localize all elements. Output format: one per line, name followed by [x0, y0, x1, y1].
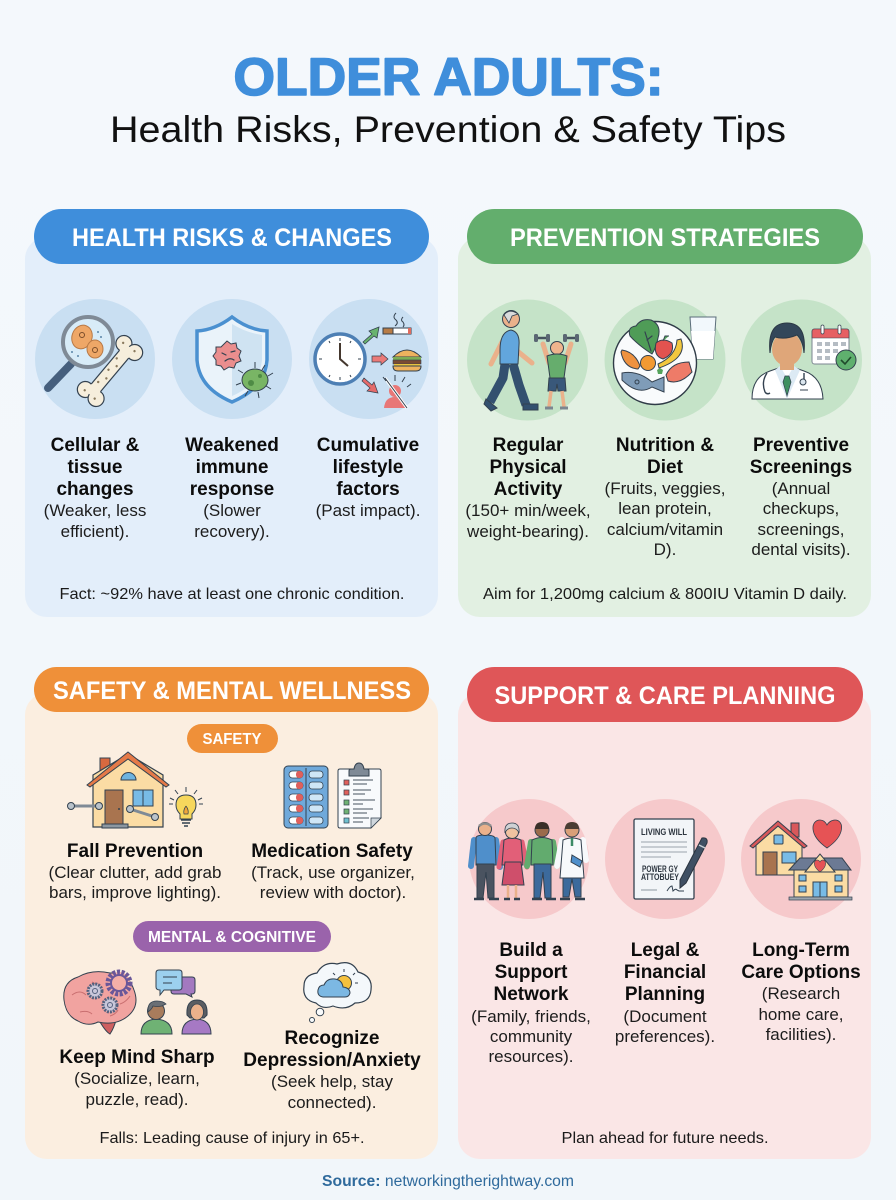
icon: legal document with pen: POWER GY: [642, 864, 678, 874]
text: regular physical activity: Physical: [489, 457, 567, 478]
text: preventive screenings: Screenings: [750, 457, 852, 478]
text: long-term care options: facilities).: [766, 1025, 836, 1044]
fact line: Falls: Leading cause of injury in 65+.: [100, 1130, 364, 1147]
heading: support and care planning: SUPPORT & CARE PLANNING: [494, 682, 836, 710]
sub-heading: safety: SAFETY: [202, 731, 262, 748]
text: legal and financial planning: Legal &: [631, 940, 700, 961]
text: weakened immune response: immune: [196, 457, 268, 478]
title: [110, 48, 786, 150]
text: keep mind sharp: [59, 1047, 215, 1109]
text: recognize depression and anxiety: [243, 1028, 421, 1112]
text: legal and financial planning: Financial: [624, 962, 706, 983]
text: build a support network: Support: [495, 962, 568, 983]
text: regular physical activity: [465, 435, 591, 541]
text: regular physical activity: Activity: [494, 479, 563, 500]
text: cellular and tissue changes: tissue: [68, 457, 122, 478]
text: preventive screenings: [750, 435, 852, 559]
text: nutrition and diet: (Fruits, veggies,: [605, 479, 725, 498]
icon: food plate with milk: [604, 300, 726, 420]
text: fall prevention: Fall Prevention: [67, 841, 203, 862]
text: nutrition and diet: [605, 435, 725, 559]
text: cellular and tissue changes: Cellular &: [51, 435, 140, 456]
text: cumulative lifestyle factors: [316, 435, 420, 520]
text: keep mind sharp: puzzle, read).: [86, 1090, 188, 1109]
icon: legal document with pen: [605, 799, 725, 919]
text: build a support network: Build a: [499, 940, 563, 961]
text: medication safety: review with doctor).: [260, 883, 406, 902]
text: fall prevention: bars, improve lighting).: [49, 883, 221, 902]
text: cellular and tissue changes: changes: [56, 479, 134, 500]
text: long-term care options: [741, 940, 861, 1044]
text: regular physical activity: weight-bearing).: [466, 522, 589, 541]
text: build a support network: community: [490, 1027, 573, 1046]
icon: thought cloud with sun: [304, 963, 371, 1022]
text: medication safety: Medication Safety: [251, 841, 413, 862]
text: fall prevention: [49, 841, 221, 902]
planning note: Plan ahead for future needs.: [562, 1130, 768, 1147]
heading: safety and mental wellness: SAFETY & MENTAL WELLNESS: [53, 677, 411, 705]
text: build a support network: [471, 940, 591, 1066]
text: medication safety: (Track, use organizer,: [251, 863, 415, 882]
icon: homes with heart: [741, 799, 861, 919]
text: nutrition and diet: lean protein,: [618, 499, 712, 518]
text: legal and financial planning: [615, 940, 715, 1046]
text: preventive screenings: checkups,: [763, 499, 839, 518]
text: preventive screenings: screenings,: [758, 520, 844, 539]
text: preventive screenings: dental visits).: [751, 540, 851, 559]
icon: magnifying glass over cells with bone: [35, 299, 155, 419]
heading: support and care planning: [467, 667, 863, 722]
text: weakened immune response: [185, 435, 279, 541]
text: weakened immune response: Weakened: [185, 435, 279, 456]
text: long-term care options: home care,: [758, 1005, 844, 1024]
text: fall prevention: (Clear clutter, add grab: [49, 863, 221, 882]
text: long-term care options: (Research: [762, 984, 840, 1003]
icon: pill blister and medication checklist: [284, 763, 381, 828]
text: legal and financial planning: Planning: [625, 984, 705, 1005]
text: cellular and tissue changes: [44, 435, 146, 541]
sub-heading: mental and cognitive: [133, 921, 331, 952]
text: build a support network: resources).: [488, 1047, 574, 1066]
text: weakened immune response: response: [190, 479, 274, 500]
text: long-term care options: Care Options: [741, 962, 861, 983]
text: weakened immune response: recovery).: [194, 522, 270, 541]
text: keep mind sharp: (Socialize, learn,: [74, 1069, 200, 1088]
text: nutrition and diet: calcium/vitamin: [607, 520, 723, 539]
text: preventive screenings: (Annual: [772, 479, 830, 498]
text: cellular and tissue changes: (Weaker, less: [44, 501, 146, 520]
text: long-term care options: Long-Term: [752, 940, 850, 961]
text: medication safety: [251, 841, 415, 902]
text: nutrition and diet: Nutrition &: [616, 435, 714, 456]
text: cellular and tissue changes: efficient).: [61, 522, 129, 541]
heading: prevention strategies: [467, 209, 863, 264]
text: recognize depression and anxiety: Recognize: [284, 1028, 380, 1049]
text: weakened immune response: (Slower: [203, 501, 261, 520]
sub-heading: safety: [187, 724, 278, 753]
heading: safety and mental wellness: [34, 667, 429, 712]
panel: support and care planning: [458, 667, 871, 1159]
icon: legal document with pen: LIVING WILL: [641, 827, 687, 838]
icon: doctor with calendar check: [741, 300, 862, 420]
title: Health Risks, Prevention & Safety Tips: [110, 109, 786, 150]
text: legal and financial planning: (Document: [623, 1007, 707, 1026]
icon: legal document with pen: ATTOBUEY: [641, 872, 679, 882]
text: cumulative lifestyle factors: lifestyle: [333, 457, 403, 478]
icon: house with grab bars and light bulb: [68, 752, 203, 828]
icon: shield with germ: [172, 299, 292, 419]
title: OLDER ADULTS:: [234, 48, 664, 107]
text: cumulative lifestyle factors: (Past impact).: [316, 501, 420, 520]
text: cumulative lifestyle factors: factors: [336, 479, 400, 500]
icon: walking senior and child with dumbbells: [467, 300, 588, 420]
fact line: Fact: ~92% have at least one chronic condition.: [60, 586, 404, 603]
text: legal and financial planning: preferences).: [615, 1027, 715, 1046]
text: keep mind sharp: Keep Mind Sharp: [59, 1047, 215, 1068]
source line: Source: networkingtherightway.com: [322, 1173, 574, 1190]
text: build a support network: Network: [494, 984, 569, 1005]
text: nutrition and diet: Diet: [647, 457, 684, 478]
panel: prevention strategies: [458, 209, 871, 617]
panel: safety and mental wellness: [25, 667, 438, 1159]
text: preventive screenings: Preventive: [753, 435, 849, 456]
text: recognize depression and anxiety: (Seek help, stay: [271, 1072, 393, 1091]
icon: clock with lifestyle factors: [309, 299, 429, 419]
heading: prevention strategies: PREVENTION STRATEGIES: [510, 224, 820, 252]
panel: health risks and changes: [25, 209, 438, 617]
heading: health risks and changes: [34, 209, 429, 264]
text: regular physical activity: (150+ min/week,: [465, 501, 591, 520]
heading: health risks and changes: HEALTH RISKS & CHANGES: [72, 224, 392, 252]
text: nutrition and diet: D).: [654, 540, 676, 559]
icon: brain with gears and conversing people: [64, 970, 211, 1034]
sub-heading: mental and cognitive: MENTAL & COGNITIVE: [148, 929, 316, 946]
text: cumulative lifestyle factors: Cumulative: [317, 435, 419, 456]
tip line: Aim for 1,200mg calcium & 800IU Vitamin D daily.: [483, 586, 847, 603]
text: regular physical activity: Regular: [493, 435, 564, 456]
text: recognize depression and anxiety: connected).: [288, 1093, 376, 1112]
text: recognize depression and anxiety: Depression/Anxiety: [243, 1050, 421, 1071]
icon: support network of people holding hands: [469, 799, 589, 919]
text: build a support network: (Family, friends,: [471, 1007, 591, 1026]
